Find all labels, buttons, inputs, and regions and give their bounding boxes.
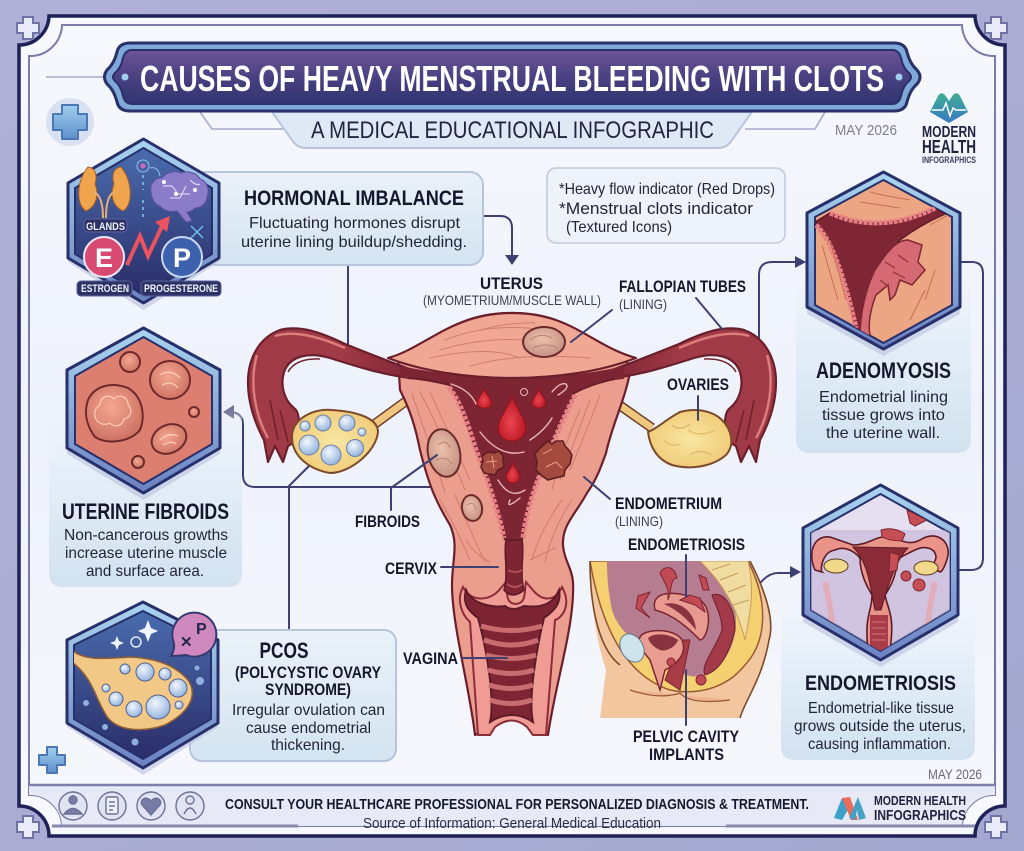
panel: adenomyosis: ADENOMYOSIS [816,358,951,383]
icon: stethoscope [176,792,204,820]
icon: corner plus bottom right [985,816,1007,838]
pubic bone [619,633,645,663]
anatomy: uterus diagram [248,313,776,735]
line: endometriosis leader [685,555,687,597]
hexagon: adenomyosis icon [807,172,960,356]
footer logo [834,793,966,824]
panel: pcos: SYNDROME) [265,680,351,699]
uterus body [398,313,630,735]
icon: small plus [39,747,65,773]
footer band [29,785,995,826]
icon: estrogen [84,237,124,277]
panel: adenomyosis: the uterine wall. [826,425,940,442]
panel: pcos: Irregular ovulation can [232,702,385,719]
panel: adenomyosis: tissue grows into [822,407,945,424]
outline [590,561,771,718]
connector lines and arrows [223,216,983,630]
logo top: HEALTH [922,137,976,157]
panel: pcos: thickening. [271,737,345,754]
icon: corner plus top right [985,17,1007,39]
panel: endometriosis: Endometrial-like tissue [808,700,954,717]
fundus of uterus [388,313,636,378]
icon: hormone trend arrow [127,216,170,265]
panel: hormonal imbalance: Fluctuating hormones disrupt [249,215,461,232]
line: pcos to ovary [289,462,313,630]
icon: medical plus [46,98,94,146]
label: estrogen [77,281,132,296]
arrow: fibroids to uterine fibroids panel [223,405,466,487]
line: pelvic leader [685,670,687,725]
panel: pcos [190,630,396,761]
panel: pcos: cause endometrial [246,720,371,737]
line: ovaries leader [697,396,699,420]
label: estrogen: ESTROGEN [81,283,129,295]
footer logo: MODERN HEALTH [874,793,966,808]
label: ovaries: OVARIES [667,376,729,394]
footer text [225,796,809,832]
bladder wall [639,631,684,690]
fundus streaks [430,323,590,366]
label: uterus: (MYOMETRIUM/MUSCLE WALL) [423,292,601,308]
endometrial cavity [400,366,624,590]
logo top: MODERN [922,124,976,141]
icon: progesterone [162,237,202,277]
logo top [922,93,976,165]
line: cervix leader [441,566,498,568]
rectum [704,594,735,675]
anatomy: pelvic cross-section [585,536,780,764]
fat layer [590,561,763,692]
outer genital contour [630,690,730,701]
panel: hormonal imbalance: uterine lining buildup/shedding. [241,234,467,251]
panel: uterine fibroids: increase uterine muscle [65,545,227,562]
panel: uterine fibroids: and surface area. [86,563,204,580]
subtitle ribbon: A MEDICAL EDUCATIONAL INFOGRAPHIC [311,117,714,144]
hexagon: endometriosis icon [803,485,958,667]
cavity [607,561,736,677]
panel: uterine fibroids: Non-cancerous growths [64,527,228,544]
icon: doctor [59,792,87,820]
arrow: hormonal imbalance to uterus [484,216,519,265]
panel: endometriosis: causing inflammation. [808,736,951,753]
cavity walls [408,378,614,540]
fallopian tube right [604,328,776,462]
label: vagina: VAGINA [403,650,458,668]
icon: clipboard [98,792,126,820]
panel: endometriosis [781,600,975,760]
icon: brain [151,172,208,222]
label: fallopian tubes [619,278,746,312]
panel: endometriosis: grows outside the uterus, [794,718,966,735]
hexagon: hormonal imbalance icon [68,139,221,310]
footer text: CONSULT YOUR HEALTHCARE PROFESSIONAL FOR PERSONALIZED DIAGNOSIS & TREATMENT. [225,796,809,813]
line: adenomyosis to endometriosis [958,262,983,570]
ligaments [372,399,652,428]
icon: speech bubble no progesterone: P [196,621,207,638]
ovary left with follicles [292,410,378,473]
panel: pcos: PCOS [260,638,308,663]
label: endometrium [615,495,722,529]
note: legend: (Textured Icons) [566,219,672,236]
icon: corner plus bottom left [17,816,39,838]
icon: progesterone: P [173,243,191,273]
line: vagina leader [462,657,507,659]
muscle streaks [412,392,600,562]
date bottom: MAY 2026 [928,766,982,782]
icon: glands [79,167,130,233]
hexagon: pcos icon [67,602,218,775]
spine [700,561,751,640]
footer text: Source of Information: General Medical Education [363,815,661,832]
icon: clots [481,441,572,480]
subtitle ribbon [46,77,825,148]
label: pelvic cavity implants [633,728,739,764]
line: fallopian leaders [571,298,722,342]
panel: endometriosis: ENDOMETRIOSIS [805,672,956,695]
label: uterus: UTERUS [480,275,543,293]
panel: hormonal imbalance [190,172,483,265]
label: pelvic cavity implants: IMPLANTS [649,746,724,764]
label: endometrium: ENDOMETRIUM [615,495,722,513]
panel: uterine fibroids: UTERINE FIBROIDS [62,499,229,524]
cavity swirls [451,384,567,505]
label: uterus [423,275,601,308]
arrow: tube to adenomyosis [759,256,806,348]
cervix and vagina [460,540,566,735]
implants [636,568,709,685]
label: fibroids: FIBROIDS [355,513,420,531]
endometrial lining [449,387,575,538]
ovary right [648,410,731,467]
line: hormonal imbalance to tube [347,265,349,346]
panel: hormonal imbalance: HORMONAL IMBALANCE [244,187,464,210]
icon: corner plus top left [17,17,39,39]
fibroids in uterus [423,327,565,523]
panel: adenomyosis [796,270,971,453]
logo top: INFOGRAPHICS [922,155,976,165]
title banner [104,43,920,111]
panel: pcos: (POLYCYSTIC OVARY [235,663,382,682]
panel: uterine fibroids [49,400,242,587]
arrow: implants to endometriosis [713,566,801,628]
icon: blood drops [477,388,546,483]
label: fallopian tubes: FALLOPIAN TUBES [619,278,746,296]
vaginal canal [665,640,690,690]
icon: speech bubble no progesterone: ✕ [180,634,193,651]
label: progesterone [141,281,221,296]
label: fallopian tubes: (LINING) [619,296,667,312]
footer logo: INFOGRAPHICS [874,807,966,824]
hexagon: uterine fibroids icon [67,328,220,500]
line: endometrium leader [584,477,610,499]
note: legend: *Menstrual clots indicator [559,199,753,218]
label: endometrium: (LINING) [615,513,663,529]
uterus section [654,593,709,640]
date top: MAY 2026 [835,122,897,139]
label: endometriosis: ENDOMETRIOSIS [628,536,745,554]
labels and leaders [355,275,746,668]
icon: heart [137,792,165,820]
note: legend [547,168,785,243]
icon: glands: GLANDS [86,221,125,233]
line: fibroids leader [391,455,437,510]
footer icons [59,792,204,820]
label: progesterone: PROGESTERONE [144,283,218,295]
label: cervix: CERVIX [385,560,437,578]
panel: adenomyosis: Endometrial lining [819,389,948,406]
icon: speech bubble no progesterone [171,613,216,657]
icon: estrogen: E [95,243,113,273]
fallopian tube left [248,328,420,462]
note: legend: *Heavy flow indicator (Red Drops) [559,181,775,198]
label: pelvic cavity implants: PELVIC CAVITY [633,728,739,746]
